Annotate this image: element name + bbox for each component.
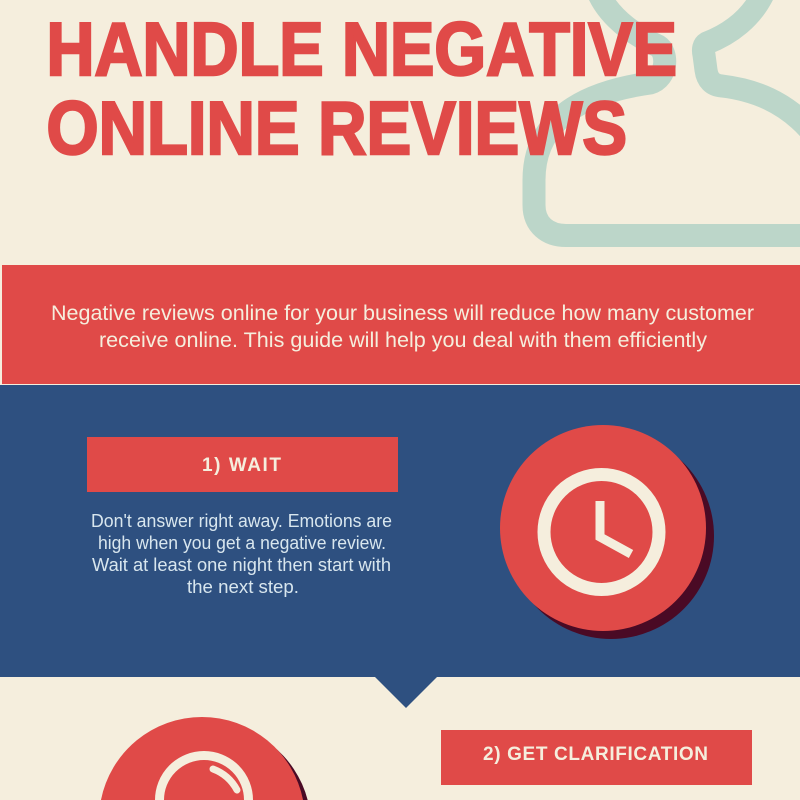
- step 1 text: the next step.: [187, 577, 299, 597]
- step 1 text: [91, 511, 392, 597]
- intro text: Negative reviews online for your business will reduce how many customer: [51, 302, 754, 325]
- intro text: [51, 302, 754, 352]
- step 2 heading: 2) GET CLARIFICATION: [483, 744, 708, 765]
- title: HANDLE NEGATIVE: [46, 7, 677, 91]
- title: [46, 7, 677, 170]
- icon: clock: [500, 425, 714, 639]
- icon: magnifier: [101, 717, 308, 800]
- title: ONLINE REVIEWS: [46, 86, 627, 170]
- panel: step 2: [101, 717, 752, 800]
- step 1 heading: [87, 437, 398, 492]
- pointer arrow: [375, 677, 437, 708]
- panel: step 1: [0, 385, 800, 708]
- step 1 text: Don't answer right away. Emotions are: [91, 511, 392, 531]
- icon: person outline: [534, 0, 800, 236]
- panel: introduction: [2, 265, 800, 384]
- step 1 text: Wait at least one night then start with: [92, 555, 391, 575]
- step 1 heading: 1) WAIT: [202, 455, 281, 476]
- step 1 text: high when you get a negative review.: [98, 533, 386, 553]
- step 2 heading: [441, 730, 752, 785]
- intro text: receive online. This guide will help you deal with them efficiently: [99, 329, 708, 352]
